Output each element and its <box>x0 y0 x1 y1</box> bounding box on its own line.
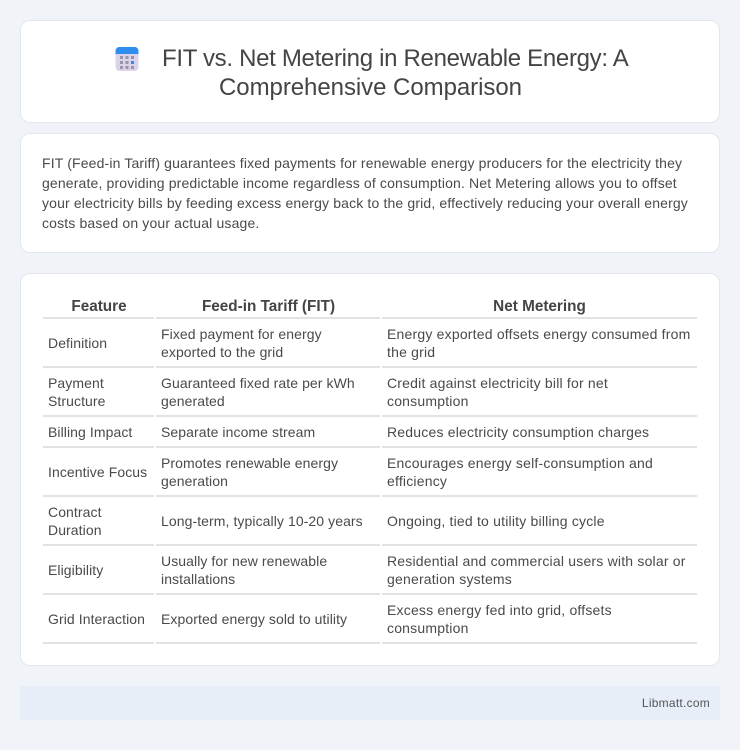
title: FIT vs. Net Metering in Renewable Energy: A <box>162 45 628 72</box>
row: incentive focus: Encourages energy self-consumption and <box>387 455 653 471</box>
row: incentive focus: Incentive Focus <box>48 464 147 480</box>
panel: summary card <box>20 133 720 253</box>
summary text: your electricity bills by feeding excess energy back to the grid, effectively reducing your overall energy <box>42 195 688 211</box>
panel: title card <box>20 20 720 123</box>
row: incentive focus: efficiency <box>387 473 447 489</box>
row: definition <box>48 326 690 360</box>
row: eligibility: Eligibility <box>48 562 103 578</box>
row: eligibility: Usually for new renewable <box>161 553 327 569</box>
panel: comparison table card <box>20 273 720 666</box>
row: payment structure: Credit against electricity bill for net <box>387 375 608 391</box>
row: contract duration: Ongoing, tied to utility billing cycle <box>387 513 605 529</box>
row: billing impact: Separate income stream <box>161 424 315 440</box>
footer bar <box>20 686 720 720</box>
row: grid interaction: Excess energy fed into grid, offsets <box>387 602 612 618</box>
row: eligibility: generation systems <box>387 571 512 587</box>
row: definition: exported to the grid <box>161 344 283 360</box>
row: billing impact: Billing Impact <box>48 424 132 440</box>
row: payment structure: consumption <box>387 393 469 409</box>
summary text: FIT (Feed-in Tariff) guarantees fixed payments for renewable energy producers for the electricity they <box>42 155 682 171</box>
title: Comprehensive Comparison <box>219 74 522 101</box>
table header: feature: Feature <box>71 298 127 315</box>
title <box>162 45 629 101</box>
table header: net metering: Net Metering <box>493 298 586 315</box>
row: contract duration <box>48 504 605 538</box>
icon: calendar <box>116 47 138 71</box>
row: contract duration: Long-term, typically 10-20 years <box>161 513 363 529</box>
table header: feed-in tariff: Feed-in Tariff (FIT) <box>202 298 335 315</box>
summary text: costs based on your actual usage. <box>42 215 259 231</box>
row: contract duration: Contract <box>48 504 102 520</box>
row: payment structure <box>48 375 608 409</box>
row: incentive focus: generation <box>161 473 228 489</box>
row: payment structure: generated <box>161 393 225 409</box>
row: grid interaction: consumption <box>387 620 469 636</box>
row: eligibility <box>48 553 686 587</box>
row: billing impact: Reduces electricity consumption charges <box>387 424 649 440</box>
summary text <box>42 155 688 231</box>
row: definition: Energy exported offsets energy consumed from <box>387 326 690 342</box>
comparison table <box>43 298 697 644</box>
footer credit: Libmatt.com <box>642 696 710 710</box>
row: eligibility: installations <box>161 571 235 587</box>
row: definition: the grid <box>387 344 435 360</box>
row: eligibility: Residential and commercial users with solar or <box>387 553 686 569</box>
row: payment structure: Guaranteed fixed rate per kWh <box>161 375 355 391</box>
row: payment structure: Payment <box>48 375 104 391</box>
row: billing impact <box>48 424 649 440</box>
row: grid interaction <box>48 602 612 636</box>
row: grid interaction: Exported energy sold to utility <box>161 611 347 627</box>
row: grid interaction: Grid Interaction <box>48 611 145 627</box>
row: definition: Fixed payment for energy <box>161 326 322 342</box>
summary text: generate, providing predictable income regardless of consumption. Net Metering allows you to offset <box>42 175 677 191</box>
row: incentive focus: Promotes renewable energy <box>161 455 338 471</box>
row: payment structure: Structure <box>48 393 106 409</box>
row: incentive focus <box>48 455 653 489</box>
row: definition: Definition <box>48 335 107 351</box>
row: contract duration: Duration <box>48 522 102 538</box>
